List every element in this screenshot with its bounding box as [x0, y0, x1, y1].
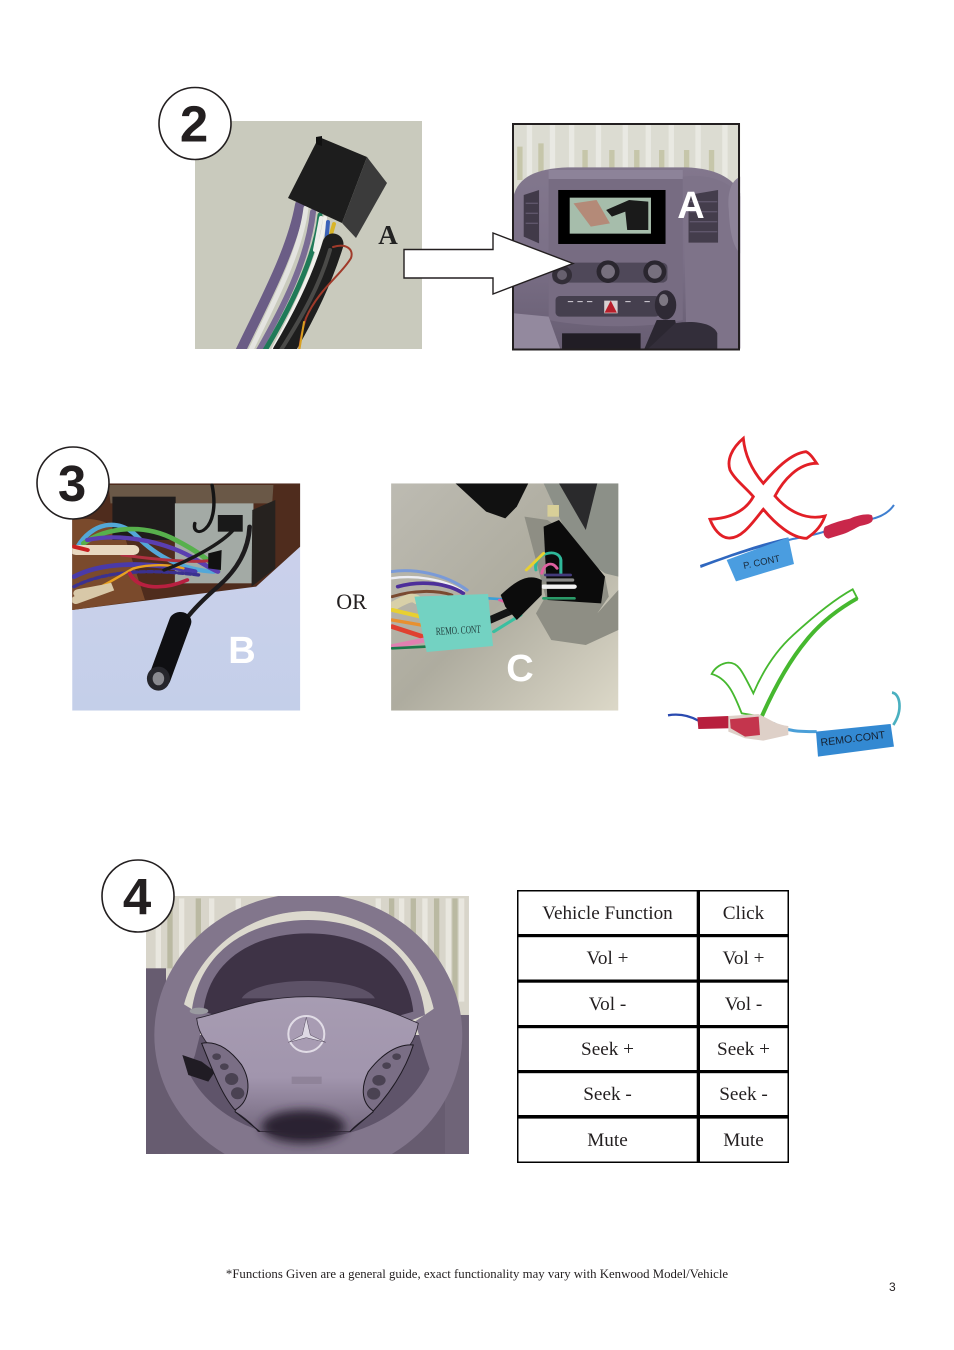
- table: vehicle function to click mapping: Seek +: [581, 1039, 634, 1060]
- footnote: *Functions Given are a general guide, exact functionality may vary with Kenwood Model/Vehicle: [226, 1267, 728, 1281]
- table: vehicle function to click mapping: Click: [723, 903, 765, 924]
- page number: 3: [889, 1280, 896, 1294]
- table: vehicle function to click mapping: Vol +: [723, 948, 764, 969]
- table: vehicle function to click mapping: Vol +: [587, 948, 628, 969]
- label: B: B: [228, 630, 256, 672]
- photo: wiring connector A: [195, 121, 422, 352]
- table: vehicle function to click mapping: Seek -: [719, 1084, 768, 1105]
- icon: green tick with REMO.CONT wire: [668, 589, 900, 757]
- label: A on connector photo: A: [378, 220, 398, 250]
- text: REMO. CONT label: REMO. CONT: [436, 624, 481, 638]
- table: vehicle function to click mapping: Mute: [587, 1130, 628, 1151]
- step badge 3: [37, 447, 109, 519]
- text: OR: OR: [336, 589, 367, 614]
- label: C: C: [506, 648, 534, 690]
- table: vehicle function to click mapping: Vol -: [589, 994, 626, 1015]
- step badge 2: 2: [180, 96, 208, 152]
- table: vehicle function to click mapping: Mute: [723, 1130, 764, 1151]
- step badge 4: [102, 860, 174, 932]
- table: vehicle function to click mapping: Vehicle Function: [542, 903, 673, 924]
- photo: steering wheel: [146, 893, 469, 1177]
- table: vehicle function to click mapping: Vol -: [725, 994, 762, 1015]
- table: vehicle function to click mapping: Seek -: [583, 1084, 632, 1105]
- step badge 2: [159, 88, 231, 160]
- icon: green tick with REMO.CONT wire: REMO.CONT: [820, 729, 886, 749]
- label: A on dashboard photo: A: [677, 185, 705, 227]
- step badge 4: 4: [123, 868, 152, 925]
- arrow: connector to dashboard: [404, 233, 573, 294]
- photo: harness with REMO CONT lead C: [391, 483, 618, 711]
- step badge 3: 3: [58, 455, 86, 512]
- icon: red cross with P. CONT wire: P. CONT: [742, 553, 781, 572]
- table: vehicle function to click mapping: [517, 890, 789, 1163]
- photo: radio with aerial lead B: [72, 483, 300, 711]
- table: vehicle function to click mapping: Seek +: [717, 1039, 770, 1060]
- icon: red cross with P. CONT wire: [700, 438, 894, 581]
- photo: vehicle dashboard: [513, 123, 740, 349]
